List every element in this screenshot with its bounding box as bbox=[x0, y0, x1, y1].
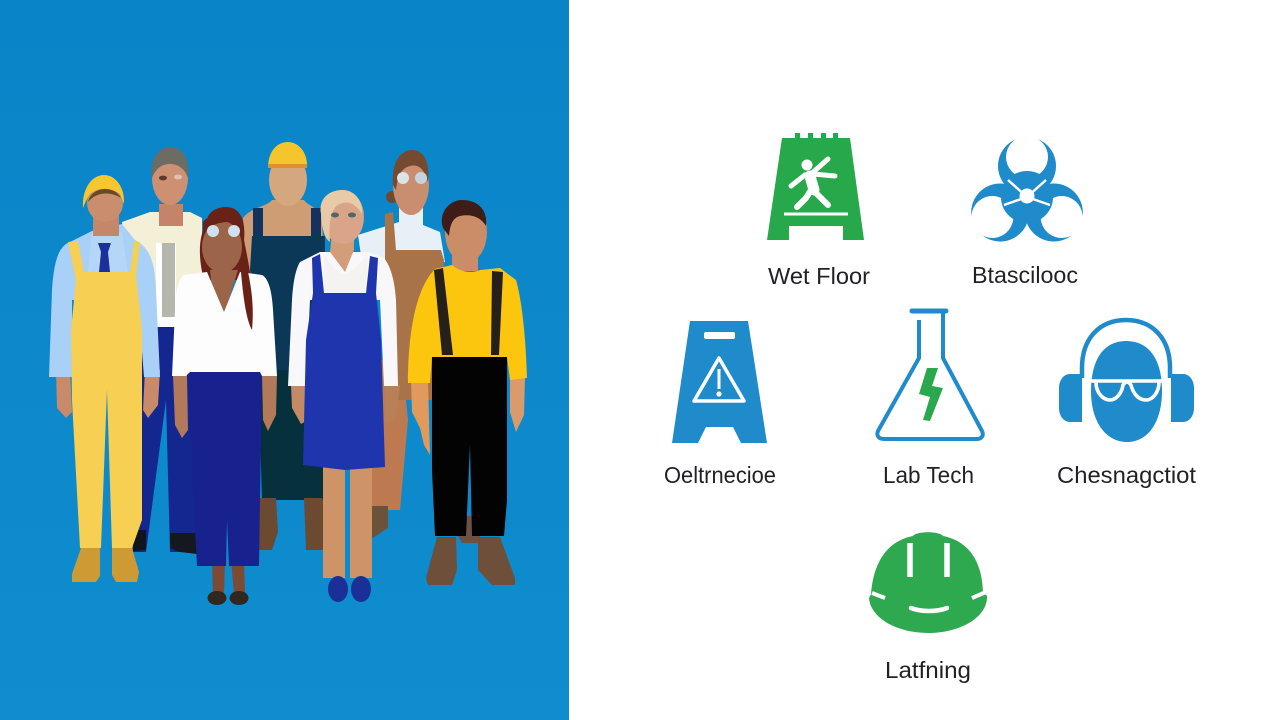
label: Wet Floor: Wet Floor bbox=[768, 263, 870, 289]
label: Chesnagctiot: Chesnagctiot bbox=[1057, 462, 1197, 488]
worker: man in yellow shirt with black trousers (front right) bbox=[408, 200, 527, 585]
worker: woman with brown apron (back row) bbox=[358, 150, 445, 541]
group of workers bbox=[49, 142, 527, 605]
icon: green hard hat bbox=[869, 532, 987, 633]
worker: man in navy overalls and hard hat (back row) bbox=[243, 142, 332, 550]
worker: woman in white blouse and navy trousers (front centre) bbox=[172, 207, 277, 605]
worker: blonde woman in blue pinafore (front centre right) bbox=[288, 190, 400, 602]
icon: head with ear protection and goggles bbox=[1059, 320, 1194, 442]
icon: wet floor sign bbox=[767, 133, 864, 240]
label: Latfning: Latfning bbox=[885, 657, 971, 683]
icon: caution sign bbox=[672, 321, 767, 443]
label: Lab Tech: Lab Tech bbox=[883, 462, 974, 488]
worker: grey-haired man in white vest (back row) bbox=[122, 147, 202, 554]
icon: biohazard symbol bbox=[971, 138, 1083, 242]
lightning bolt bbox=[919, 368, 943, 421]
label: Oeltrnecioe: Oeltrnecioe bbox=[664, 462, 776, 488]
icon: lab flask bbox=[877, 311, 983, 439]
label: Btascilooc: Btascilooc bbox=[972, 262, 1078, 288]
slipping figure bbox=[784, 159, 848, 214]
worker: man in yellow overalls and hard hat (front left) bbox=[49, 175, 160, 582]
panel: blue background bbox=[0, 0, 569, 720]
